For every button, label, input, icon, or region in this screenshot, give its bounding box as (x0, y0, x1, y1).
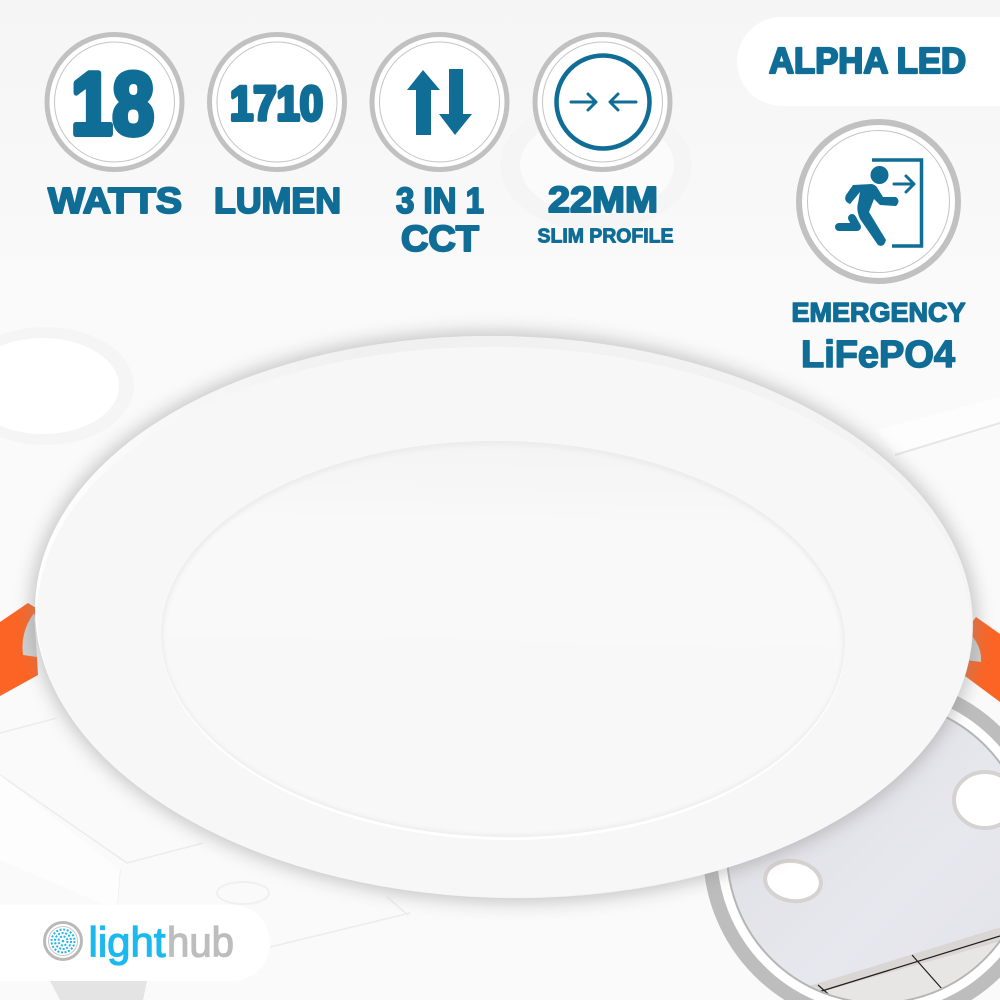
badge: 1710 lumen (210, 34, 344, 221)
icon: lighthub logo mark (44, 922, 82, 960)
orange spring clip: left (0, 603, 38, 696)
LED panel light (24, 320, 984, 914)
icon: slim profile arrows (556, 56, 650, 148)
icon: up and down arrows (407, 69, 472, 135)
badge: emergency LiFePO4: LiFePO4 (801, 334, 955, 376)
inset circle: installed ceiling view (710, 684, 1000, 1000)
badge: 3 in 1 CCT (372, 34, 507, 259)
brand pill: Alpha LED: ALPHA LED (769, 40, 966, 81)
badge: 1710 lumen: LUMEN (214, 180, 341, 221)
background: ceiling downlight behind slim profile badge (500, 99, 692, 231)
downlight spot upper (954, 772, 1000, 828)
badge: 18 watts: 18 (71, 54, 154, 153)
panel light surface (160, 439, 846, 841)
logo pill: lighthub: hub (167, 918, 234, 966)
badge: 18 watts (47, 34, 182, 221)
badge: 22mm slim profile (535, 34, 674, 248)
badge: 22mm slim profile: 22MM (548, 179, 658, 220)
badge: 22mm slim profile: SLIM PROFILE (538, 226, 674, 248)
downlight spot lower (762, 857, 824, 905)
logo pill: lighthub: light (88, 918, 166, 966)
badge: 3 in 1 CCT: CCT (401, 218, 479, 259)
badge: emergency LiFePO4: EMERGENCY (792, 298, 966, 328)
badge: 18 watts: WATTS (48, 180, 182, 221)
logo pill: lighthub (0, 905, 270, 981)
background: ceiling downlight left (0, 327, 134, 445)
badge: 3 in 1 CCT: 3 IN 1 (396, 180, 484, 221)
badge: emergency LiFePO4 (792, 122, 966, 376)
orange spring clip: right (965, 617, 1000, 702)
panel rim (30, 335, 978, 909)
brand pill: Alpha LED (737, 17, 1000, 106)
icon: running man exit (839, 160, 922, 246)
badge: 1710 lumen: 1710 (230, 78, 323, 131)
